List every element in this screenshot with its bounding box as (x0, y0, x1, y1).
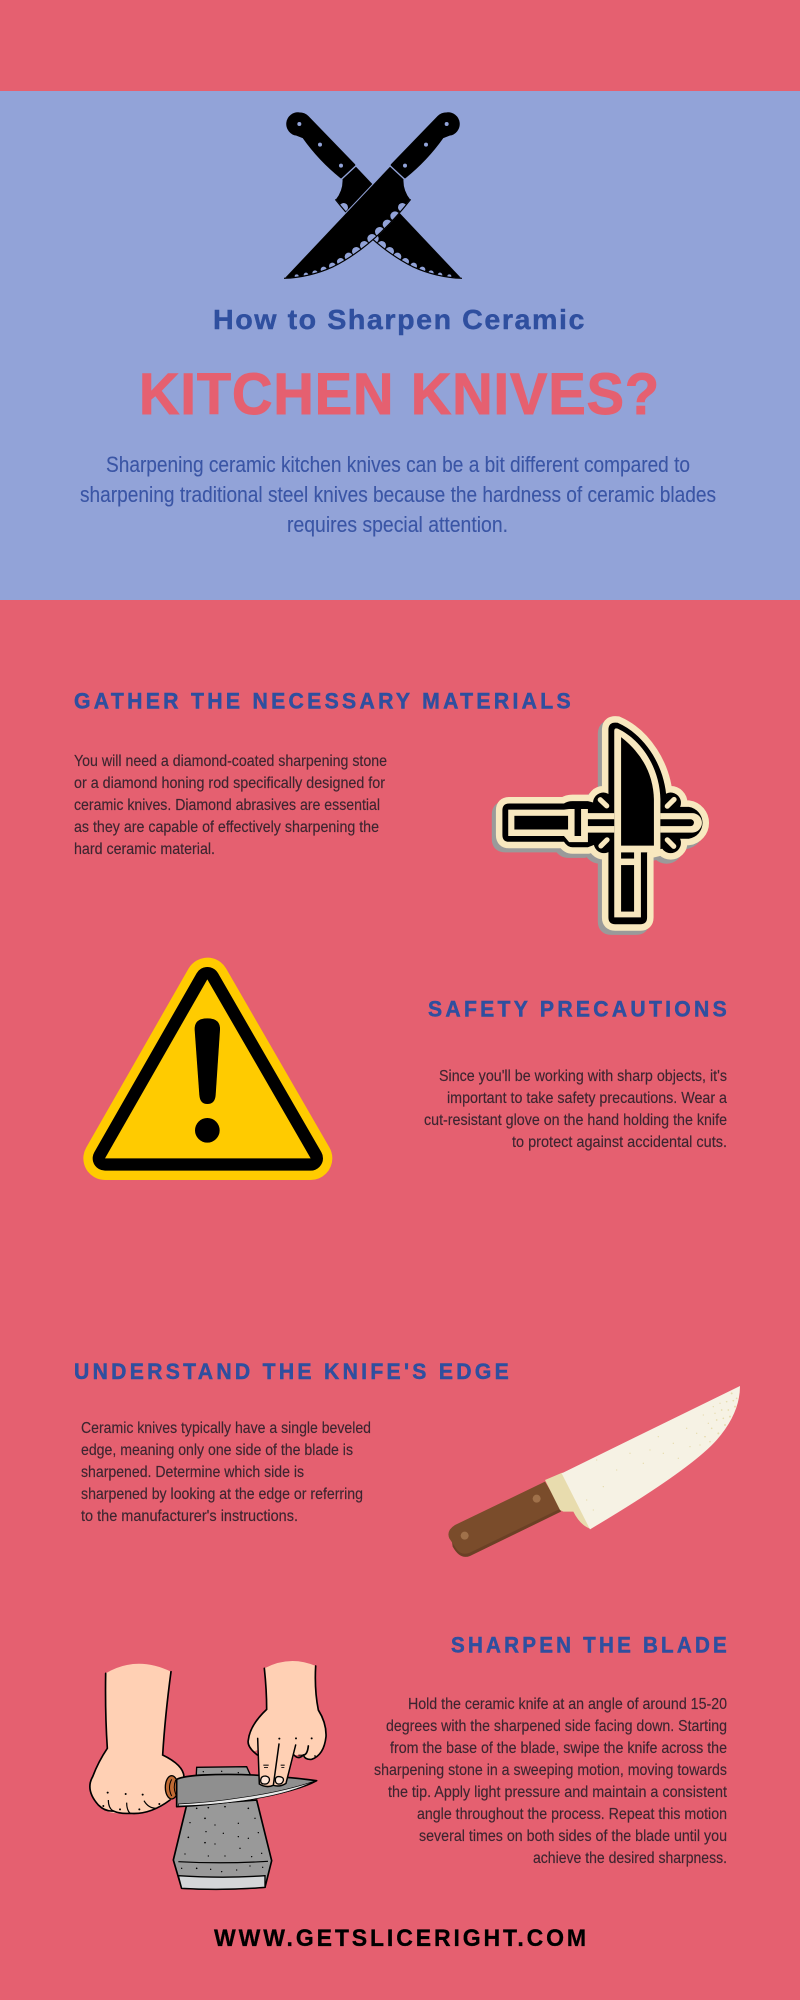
text: gather: You will need a diamond-coated sharpening stone (74, 753, 387, 770)
heading: how to sharpen: How to Sharpen Ceramic (213, 304, 586, 335)
footer url: WWW.GETSLICERIGHT.COM (214, 1925, 589, 1952)
intro text: sharpening traditional steel knives because the hardness of ceramic blades (80, 482, 716, 507)
intro text: requires special attention. (287, 512, 508, 537)
text: sharpen (374, 1696, 727, 1867)
panel: sharpen the blade (90, 1632, 730, 1889)
text: understand: edge, meaning only one side of the blade is (81, 1442, 353, 1459)
panel: header (0, 91, 800, 600)
icon: hands sharpening knife on stone (90, 1661, 326, 1889)
heading: gather: GATHER THE NECESSARY MATERIALS (74, 688, 574, 714)
panel: gather materials (74, 688, 703, 928)
text: safety: cut-resistant glove on the hand holding the knife (424, 1112, 727, 1129)
icon: crossed knives (284, 113, 462, 278)
icon: warning triangle (105, 979, 311, 1158)
text: sharpen: the tip. Apply light pressure and maintain a consistent (388, 1784, 727, 1801)
heading: safety: SAFETY PRECAUTIONS (428, 996, 730, 1022)
text: understand: sharpened by looking at the edge or referring (81, 1486, 363, 1503)
panel: safety precautions (105, 979, 730, 1158)
text: sharpen: several times on both sides of the blade until you (419, 1828, 727, 1845)
heading: kitchen knives: KITCHEN KNIVES? (139, 362, 660, 427)
text: understand: sharpened. Determine which side is (81, 1464, 304, 1481)
text: sharpen: Hold the ceramic knife at an angle of around 15-20 (408, 1696, 727, 1713)
text: gather: hard ceramic material. (74, 841, 215, 858)
intro text (80, 452, 716, 537)
text: safety: Since you'll be working with sharp objects, it's (439, 1068, 727, 1085)
text: gather: as they are capable of effectively sharpening the (74, 819, 379, 836)
text: sharpen: degrees with the sharpened side facing down. Starting (386, 1718, 727, 1735)
text: gather: or a diamond honing rod specifically designed for (74, 775, 386, 792)
heading: sharpen: SHARPEN THE BLADE (451, 1632, 730, 1658)
text: sharpen: angle throughout the process. Repeat this motion (417, 1806, 727, 1823)
text: sharpen: achieve the desired sharpness. (533, 1850, 727, 1867)
text: understand: Ceramic knives typically have a single beveled (81, 1420, 371, 1437)
text: gather: ceramic knives. Diamond abrasives are essential (74, 797, 380, 814)
text: safety (424, 1068, 727, 1151)
icon: kitchen knife (448, 1386, 740, 1557)
panel: understand the edge (74, 1359, 740, 1557)
text: understand (81, 1420, 371, 1525)
text: gather (74, 753, 387, 858)
text: sharpen: from the base of the blade, swipe the knife across the (390, 1740, 727, 1757)
heading: understand: UNDERSTAND THE KNIFE'S EDGE (74, 1359, 512, 1384)
text: understand: to the manufacturer's instructions. (81, 1508, 298, 1525)
text: safety: important to take safety precautions. Wear a (447, 1090, 727, 1107)
text: sharpen: sharpening stone in a sweeping motion, moving towards (374, 1762, 727, 1779)
intro text: Sharpening ceramic kitchen knives can be a bit different compared to (106, 452, 690, 477)
text: safety: to protect against accidental cuts. (512, 1134, 727, 1151)
icon: knife sticker (498, 723, 703, 928)
